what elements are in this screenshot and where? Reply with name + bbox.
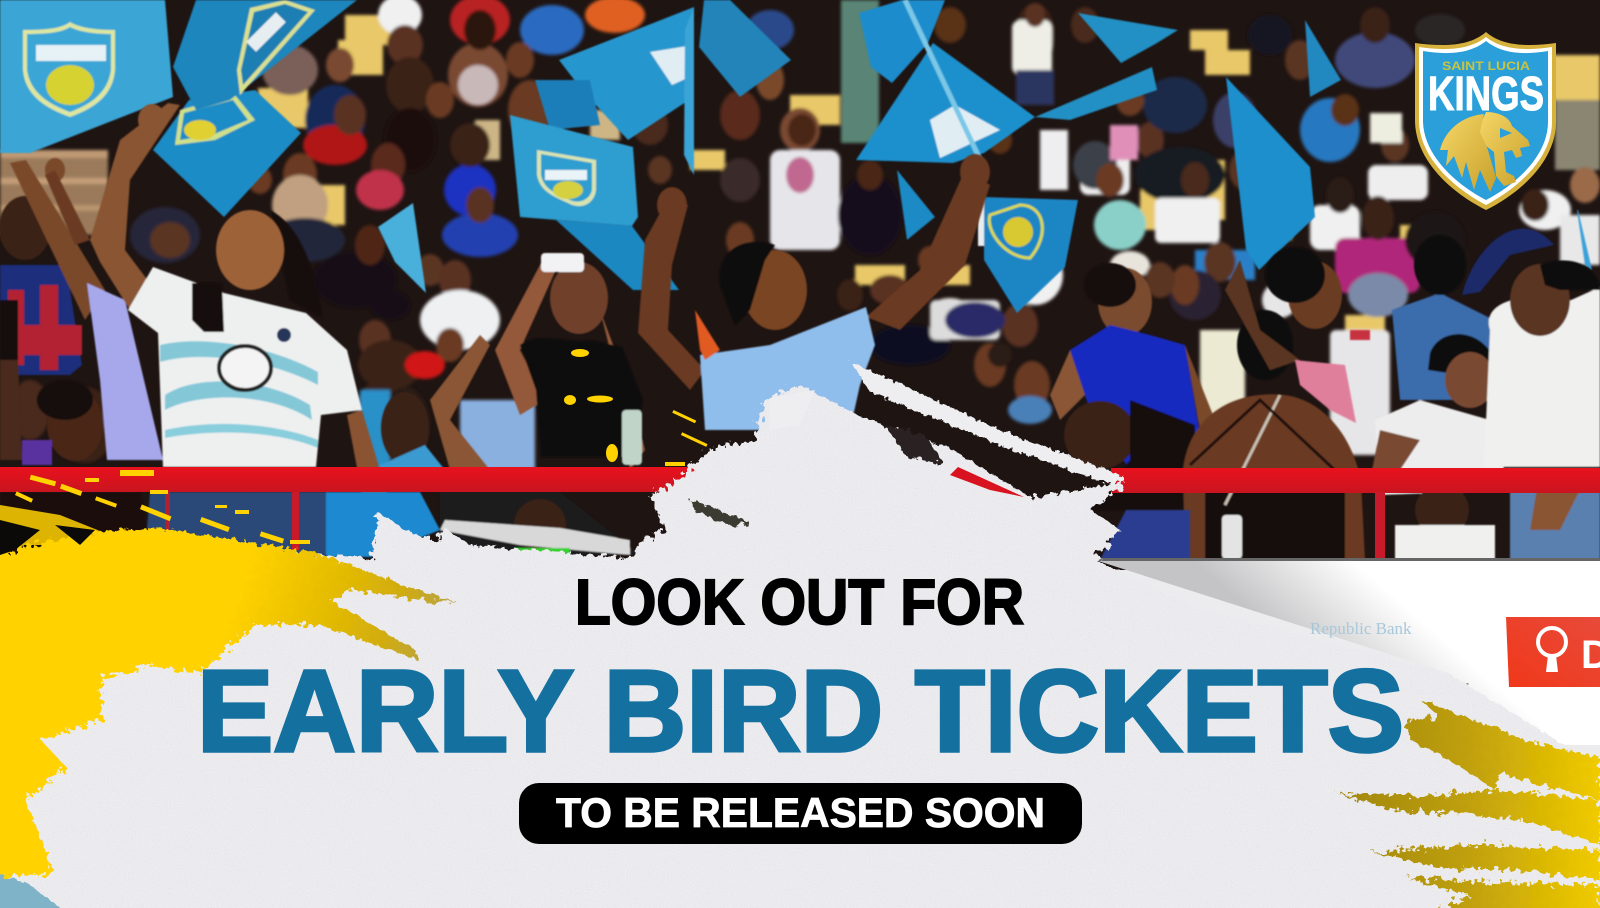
person: woman in blue top <box>1050 263 1215 470</box>
flag: lion crest <box>978 180 1078 313</box>
logo text: Saint Lucia: SAINT LUCIA <box>1442 59 1530 73</box>
heading: look out for: LOOK OUT FOR <box>575 566 1024 638</box>
flag: tall right <box>1226 77 1315 270</box>
person: denim shirt man <box>1392 293 1514 400</box>
bottom left photo remnant <box>0 872 70 908</box>
person: woman in glasses left <box>22 380 103 465</box>
logo: Saint Lucia Kings shield <box>1415 32 1556 210</box>
people: front row spectators <box>0 103 1600 563</box>
photo: stadium crowd background <box>0 0 1600 570</box>
person: bucket hat woman <box>1370 334 1510 495</box>
pill: to be released soon <box>519 783 1082 844</box>
sponsor board <box>1095 558 1600 745</box>
brush: right gold stroke <box>1336 700 1600 908</box>
back rows of spectators <box>378 0 422 35</box>
person: man in front of blue top <box>1064 400 1195 510</box>
person: man in blue polo <box>638 154 990 430</box>
person: woman seen from behind <box>1183 310 1365 560</box>
pill: to be released soon: TO BE RELEASED SOON <box>556 789 1045 836</box>
person: woman with glasses and pink top <box>1225 247 1370 423</box>
person: Barcelona shirt fan <box>0 196 82 375</box>
sponsor: league text: AGUE <box>1438 682 1469 694</box>
sponsor: Dream11 red sign <box>1506 617 1600 687</box>
person: woman in Chelsea shirt <box>90 103 392 510</box>
flag: top centre <box>559 7 694 140</box>
heading: early bird tickets: EARLY BIRD TICKETS <box>197 646 1404 776</box>
stroke: gold band three <box>1407 878 1600 908</box>
person: seated man behind rail <box>380 392 445 470</box>
stroke: gold band one <box>1336 790 1600 845</box>
bottles and small props <box>1222 515 1242 559</box>
flag: rear left <box>153 90 301 217</box>
rails: red barrier <box>0 467 1600 560</box>
brush: left yellow stroke <box>0 527 459 880</box>
person: woman with phone <box>430 253 645 470</box>
flag: right of pillar <box>856 0 1035 170</box>
lower crowd below rail <box>0 492 1190 560</box>
logo: gold lion <box>1440 112 1530 192</box>
paper: torn white sheet <box>0 385 1600 908</box>
flag: centre with crest <box>510 115 638 226</box>
logo text: Kings: KINGS <box>1428 68 1544 121</box>
yellow paint specks over crowd <box>0 349 708 545</box>
person: seated woman below rail <box>1395 484 1495 563</box>
flag: top left large <box>0 0 173 153</box>
stroke: gold band two <box>1371 845 1600 880</box>
person: woman with navy cap and white top <box>1462 229 1600 467</box>
background crowd and seats <box>0 0 1600 490</box>
torn paper strip and photo fragments <box>690 363 1126 527</box>
flag: twisted top <box>173 0 357 110</box>
brush: dark streaks lower left <box>0 520 95 555</box>
flags: waving blue team flags <box>0 0 1592 410</box>
sponsor: Republic Bank: Republic Bank <box>1310 619 1412 638</box>
person: lavender shirt fan <box>10 158 163 460</box>
